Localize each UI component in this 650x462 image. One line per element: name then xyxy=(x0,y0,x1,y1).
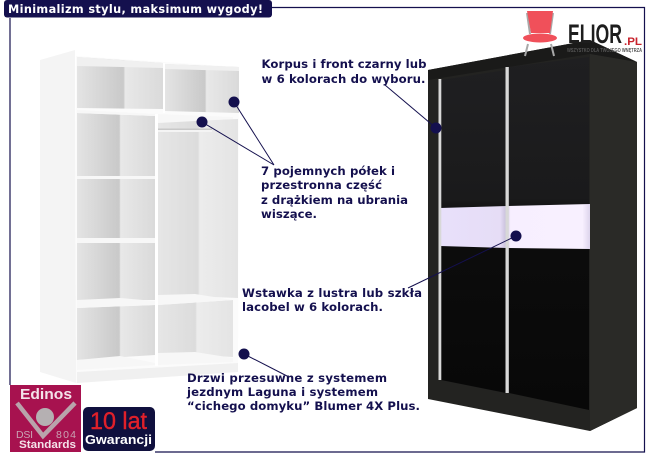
badge: 10 year warranty xyxy=(83,407,155,451)
callout: sliding doors xyxy=(186,348,420,413)
callout: shelves: przestronna część xyxy=(261,178,382,192)
right door xyxy=(509,57,589,410)
callout: carcass and front: Korpus i front czarny lub xyxy=(262,57,426,71)
callout: shelves: wiszące. xyxy=(261,207,317,221)
glass insert xyxy=(440,204,590,249)
badge: Edinos standards: 804 xyxy=(56,429,76,441)
top compartments xyxy=(77,57,239,113)
hanging rail xyxy=(158,128,212,132)
callout: glass insert: lacobel w 6 kolorach. xyxy=(242,300,383,314)
white wardrobe interior xyxy=(40,50,239,383)
badge: Edinos standards: DSI xyxy=(16,429,33,441)
middle-left compartments xyxy=(77,113,155,360)
title banner: Minimalizm stylu, maksimum wygody! xyxy=(8,3,263,16)
callout: carcass and front: w 6 kolorach do wyboru. xyxy=(262,72,426,86)
callout: glass insert: Wstawka z lustra lub szkła xyxy=(242,286,422,300)
lower right compartment xyxy=(158,300,233,357)
hanging compartment xyxy=(158,119,238,298)
shelf fronts xyxy=(77,63,233,370)
callout: shelves: 7 pojemnych półek i xyxy=(261,164,395,178)
callout: sliding doors: jezdnym Laguna i systemem xyxy=(186,385,378,399)
badge: 10 year warranty: 10 lat xyxy=(90,408,147,435)
logo: brand: ELIOR xyxy=(568,19,622,49)
plinth xyxy=(77,363,238,383)
callout: sliding doors: “cichego domyku” Blumer 4X Plus. xyxy=(187,399,420,413)
badge: Edinos standards: Edinos xyxy=(20,386,72,403)
callout: shelves: z drążkiem na ubrania xyxy=(261,193,408,207)
callout: carcass and front xyxy=(262,57,442,134)
callout: glass insert xyxy=(242,230,522,314)
badge: 10 year warranty: Gwarancji xyxy=(85,433,152,447)
left door xyxy=(441,70,506,393)
badge: Edinos standards xyxy=(10,385,81,452)
logo: chair xyxy=(523,11,557,56)
logo: brand: .PL xyxy=(624,36,642,48)
callout: shelves xyxy=(196,96,408,221)
callout: sliding doors: Drzwi przesuwne z systemem xyxy=(187,371,387,385)
door rails xyxy=(438,67,509,393)
badge: Edinos standards: Standards xyxy=(19,439,76,451)
black wardrobe xyxy=(428,40,637,431)
